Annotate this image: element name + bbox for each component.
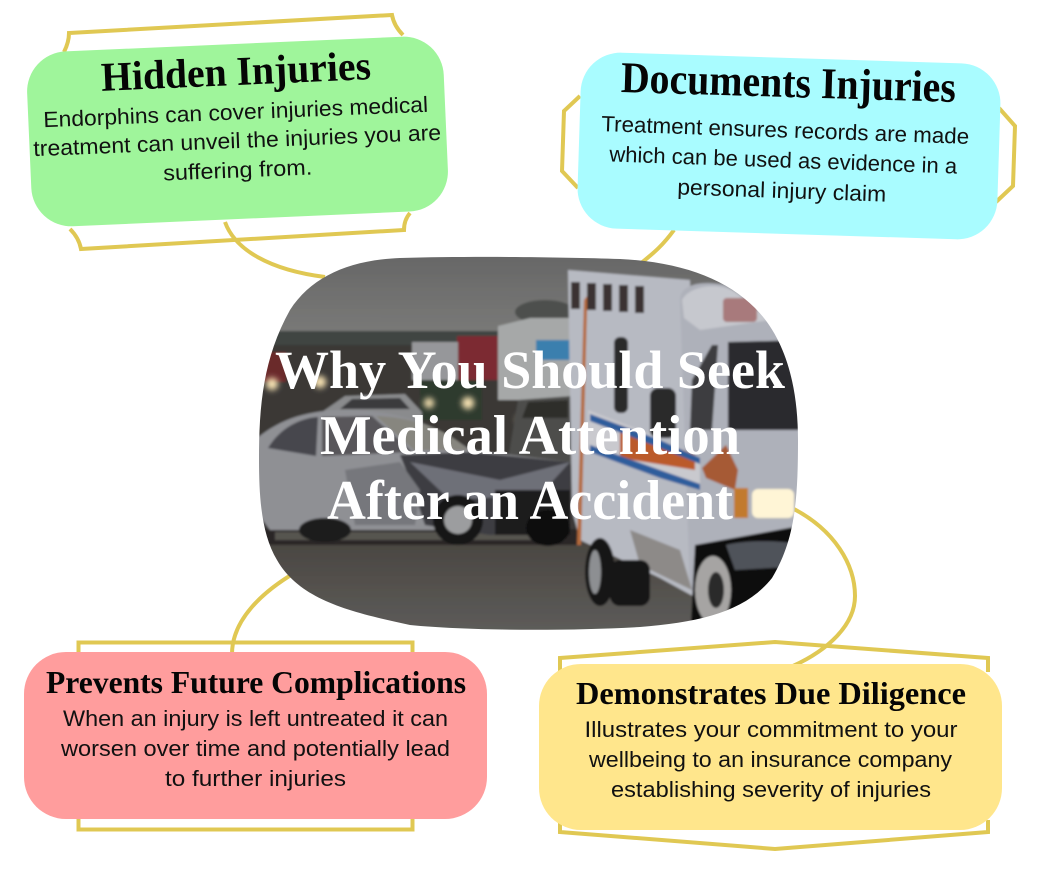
ambulance cab [680, 283, 805, 590]
light car behind [322, 394, 422, 425]
body text: Endorphins can cover injuries medical [43, 92, 429, 132]
panel: documents injuries [562, 51, 1015, 241]
headline: After an Accident [327, 470, 733, 532]
body text: which can be used as evidence in a [608, 141, 958, 179]
body text: treatment can unveil the injuries you are [33, 120, 442, 161]
headline: Why You Should Seek [275, 340, 785, 400]
white box truck [498, 318, 572, 400]
connector: prevents future complications to center [232, 572, 296, 654]
car windows [268, 417, 318, 456]
body text: wellbeing to an insurance company [588, 747, 952, 772]
body text: to further injuries [165, 766, 346, 791]
ambulance front wheel [695, 556, 731, 624]
white truck [412, 342, 458, 380]
body text: personal injury claim [677, 174, 887, 207]
bumper [726, 541, 805, 570]
yellow card [539, 664, 1002, 830]
connector: documents injuries to center [640, 230, 674, 264]
sky [280, 256, 726, 332]
connector: demonstrates due diligence to center [792, 508, 855, 666]
body text [60, 706, 450, 791]
red truck [457, 336, 499, 380]
ambulance stripes [588, 410, 700, 490]
body text [601, 111, 970, 207]
ambulance side window [614, 337, 628, 413]
body text: establishing severity of injuries [611, 777, 931, 802]
headline [275, 340, 785, 532]
ambulance rear edge [577, 290, 592, 545]
decorative frame [560, 642, 988, 849]
heading: Documents Injuries [620, 53, 957, 112]
heading: Demonstrates Due Diligence [576, 675, 966, 711]
gravel strip [250, 529, 580, 545]
body text: suffering from. [163, 155, 313, 185]
heading: Hidden Injuries [100, 42, 372, 100]
road [270, 542, 694, 630]
base fill [263, 468, 578, 531]
decorative frame [562, 96, 1015, 202]
red card [24, 652, 487, 819]
connector: hidden injuries to center [225, 222, 325, 277]
decorative frame [64, 15, 410, 249]
body text: Treatment ensures records are made [601, 111, 970, 149]
left red truck [262, 352, 286, 382]
ambulance roof lights [571, 282, 644, 313]
heading: Prevents Future Complications [46, 664, 466, 700]
mirror [650, 388, 676, 438]
body text: worsen over time and potentially lead [60, 736, 450, 761]
cab roof pod [682, 286, 770, 330]
ambulance lower panel [630, 530, 692, 590]
cab door window [690, 345, 718, 430]
car front wheel [433, 495, 483, 545]
panel: demonstrates due diligence [539, 642, 1002, 849]
ambulance rear wheels [585, 538, 615, 606]
ambulance rear box [568, 270, 700, 600]
far wheel [526, 510, 570, 546]
distant trees [514, 300, 569, 320]
car rear tire [299, 518, 351, 542]
headline: Medical Attention [320, 405, 740, 467]
panel: prevents future complications [24, 642, 487, 830]
overpass [250, 331, 500, 345]
van behind [508, 396, 572, 465]
fender orange [702, 445, 738, 490]
body text: When an injury is left untreated it can [63, 706, 448, 731]
body text [584, 717, 958, 802]
oncoming lights [264, 372, 516, 422]
green card [25, 35, 450, 228]
body text [33, 92, 442, 185]
dark truck cab [420, 380, 482, 420]
decorative frame [78, 642, 412, 830]
windshield [728, 340, 805, 430]
silver car body [255, 410, 570, 530]
headlight [734, 488, 748, 518]
cyan card [576, 51, 1002, 241]
background traffic [250, 345, 575, 470]
blue truck panel [536, 340, 572, 360]
crumpled hood [400, 452, 570, 535]
panel: hidden injuries [25, 15, 450, 249]
center photo: accident scene [250, 250, 810, 640]
ambulance dark underside [690, 526, 792, 620]
body text: Illustrates your commitment to your [584, 717, 958, 742]
car front dark [495, 490, 570, 535]
